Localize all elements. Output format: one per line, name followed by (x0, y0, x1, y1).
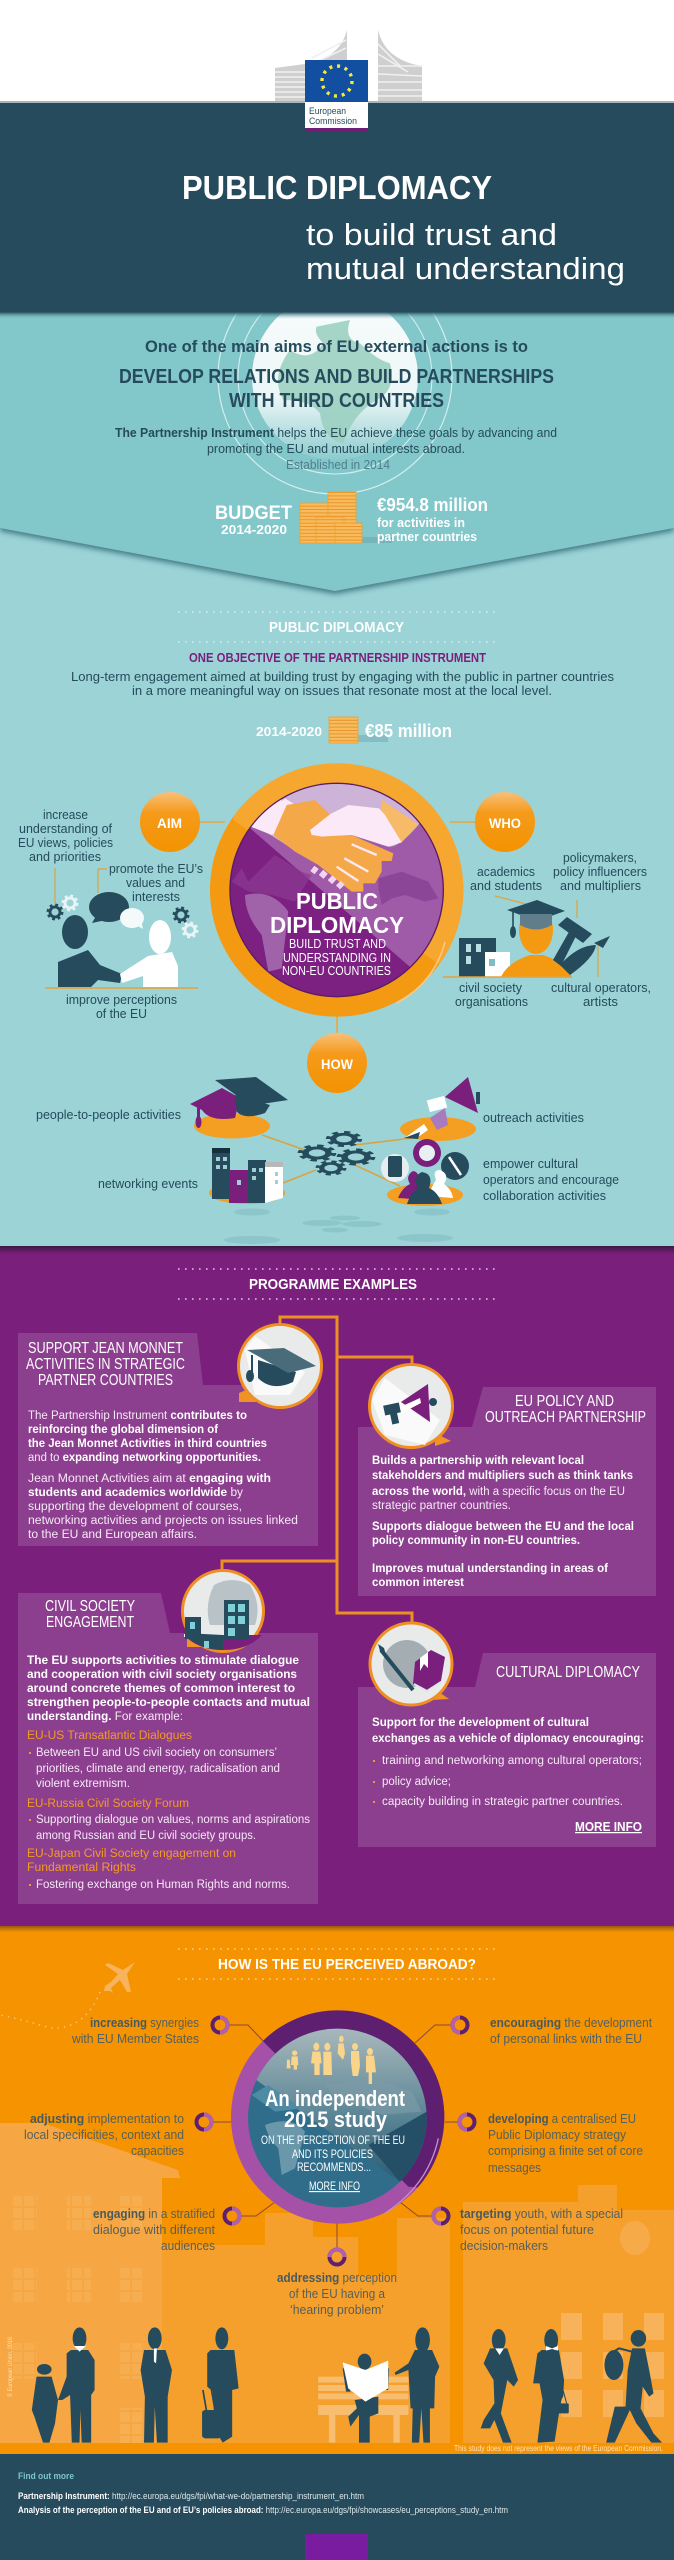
study text: 2015 study (284, 2107, 388, 2132)
recommendation: engaging: engaging in a stratified (93, 2207, 215, 2221)
recommendation: targeting: decision-makers (460, 2239, 548, 2253)
how labels: outreach activities (483, 1111, 584, 1125)
aim labels (18, 808, 203, 1021)
recommendation: developing: comprising a finite set of core (488, 2144, 643, 2158)
who badge (475, 792, 535, 852)
budget: BUDGET (215, 503, 292, 524)
who labels: policymakers, (563, 851, 637, 865)
body: priorities, climate and energy, radicalisation and (36, 1763, 280, 1775)
heading: EU POLICY AND (515, 1393, 614, 1410)
body: Fostering exchange on Human Rights and norms. (36, 1879, 290, 1891)
recommendation nodes (196, 2018, 474, 2264)
heading: PARTNER COUNTRIES (38, 1372, 173, 1389)
body: and cooperation with civil society organisations (27, 1669, 297, 1681)
heading: how is the eu perceived abroad: HOW IS THE EU PERCEIVED ABROAD? (218, 1956, 476, 1973)
recommendation: targeting (460, 2207, 623, 2253)
footer: Analysis of the perception of the EU and of EU’s policies abroad: http://ec.europa.eu/dgs/fpi/showcases/eu_perceptions_study_en.htm (18, 2505, 508, 2516)
footer (0, 2454, 674, 2560)
intro text: One of the main aims of EU external actions is to (145, 338, 528, 356)
icon: globe, brush and book badge (370, 1623, 452, 1705)
icon: coin stack (329, 717, 388, 743)
recommendation: engaging (93, 2207, 216, 2253)
connector lines (199, 822, 475, 1035)
budget for public diplomacy (256, 717, 452, 743)
who labels: academics (477, 865, 535, 879)
recommendation: targeting: targeting youth, with a special (460, 2207, 623, 2221)
budget: €954.8 million (377, 495, 488, 515)
how badge: HOW (321, 1056, 354, 1072)
budget: for activities in (377, 515, 465, 530)
central circle text (270, 888, 404, 978)
central circle text: NON-EU COUNTRIES (282, 963, 391, 978)
body: across the world, with a specific focus on the EU (372, 1486, 625, 1498)
heading: programme examples: PROGRAMME EXAMPLES (249, 1276, 417, 1293)
who labels (455, 851, 651, 1009)
body: Between EU and US civil society on consumers’ (36, 1747, 277, 1759)
recommendation: encouraging (490, 2016, 652, 2046)
body: Supporting dialogue on values, norms and aspirations (36, 1814, 310, 1826)
objective text: ONE OBJECTIVE OF THE PARTNERSHIP INSTRUMENT (189, 650, 486, 665)
title: PUBLIC DIPLOMACY (182, 169, 492, 206)
who labels: and students (470, 879, 542, 893)
who badge: WHO (489, 815, 521, 831)
body: MORE INFO (575, 1820, 642, 1834)
recommendation: addressing: of the EU having a (289, 2287, 385, 2301)
recommendation: targeting: focus on potential future (460, 2223, 594, 2237)
body: the Jean Monnet Activities in third countries (28, 1438, 267, 1450)
figure: walker with backpack (604, 2330, 662, 2443)
title: to build trust and (306, 217, 557, 252)
who labels: artists (583, 995, 618, 1009)
body: strengthen people-to-people contacts and mutual (27, 1697, 310, 1709)
study text: RECOMMENDS... (297, 2162, 371, 2174)
title (182, 169, 625, 286)
aim labels: EU views, policies (18, 836, 113, 850)
body: reinforcing the global dimension of (28, 1424, 218, 1436)
budget (215, 492, 488, 544)
aim labels: of the EU (96, 1007, 147, 1021)
silhouettes of people (32, 2327, 662, 2443)
icon: graduate with gavel, brush and buildings (443, 896, 610, 977)
European Commission logo (275, 30, 422, 132)
footer: Find out more (18, 2471, 74, 2482)
recommendation: addressing: ‘hearing problem’ (290, 2303, 384, 2317)
aim labels: interests (132, 890, 180, 904)
aim badge: AIM (157, 815, 182, 831)
body: among Russian and EU civil society groups. (36, 1830, 256, 1842)
body (28, 1410, 298, 1541)
body: around concrete themes of common interest to (27, 1683, 295, 1695)
aim labels: understanding of (19, 822, 113, 836)
recommendation: increasing synergies: increasing synergies (90, 2016, 199, 2030)
icon: plane with dotted trail (0, 1962, 135, 2028)
how labels: networking events (98, 1177, 198, 1191)
lower teal background (0, 500, 674, 1247)
body: The EU supports activities to stimulate dialogue (27, 1655, 299, 1667)
intro text: Established in 2014 (286, 457, 390, 472)
European Commission logo: Commission (309, 116, 357, 127)
panel: jean monnet (18, 1324, 322, 1546)
body: policy advice; (382, 1776, 451, 1788)
body: networking activities and projects on issues linked (28, 1515, 298, 1527)
diagram: how network of gears (190, 1077, 480, 1244)
figure: woman in dress (395, 2327, 439, 2443)
icon: people silhouettes (287, 2036, 376, 2084)
body: strategic partner countries. (372, 1500, 511, 1512)
heading: CIVIL SOCIETY (45, 1598, 135, 1615)
icon: people with media on disc (381, 1139, 469, 1206)
body: EU-US Transatlantic Dialogues (27, 1730, 192, 1742)
icon: megaphone on disc (400, 1077, 480, 1141)
study text (261, 2086, 406, 2193)
body (372, 1717, 644, 1834)
heading (45, 1598, 135, 1631)
body: Support for the development of cultural (372, 1717, 589, 1729)
how labels (36, 1108, 619, 1203)
aim labels: increase (43, 808, 88, 822)
central circle text: BUILD TRUST AND (289, 936, 386, 951)
icon: graduation cap badge (238, 1324, 322, 1408)
panel: eu policy and outreach (358, 1364, 656, 1596)
how labels: people-to-people activities (36, 1108, 181, 1122)
heading (26, 1340, 185, 1389)
study text: ON THE PERCEPTION OF THE EU (261, 2135, 405, 2147)
recommendation: developing: messages (488, 2161, 541, 2175)
body: policy community in non-EU countries. (372, 1535, 580, 1547)
figure: woman with folded leg (481, 2329, 518, 2443)
who labels: cultural operators, (551, 981, 651, 995)
connector tree (222, 1317, 412, 1624)
aim labels: values and (126, 876, 185, 890)
body: Jean Monnet Activities aim at engaging with (28, 1473, 271, 1485)
who labels: policy influencers (553, 865, 647, 879)
orange section background (0, 1923, 674, 2454)
study text: An independent (265, 2086, 406, 2111)
body: common interest (372, 1577, 464, 1589)
section heading: public diplomacy: PUBLIC DIPLOMACY (269, 619, 404, 636)
body: and to expanding networking opportunities. (28, 1452, 261, 1464)
panel: cultural diplomacy (358, 1623, 656, 1847)
recommendation: developing: Public Diplomacy strategy (488, 2128, 627, 2142)
recommendation: addressing: addressing perception (277, 2271, 397, 2285)
header band (0, 0, 674, 312)
budget for public diplomacy: 2014-2020 (256, 724, 322, 739)
objective text: Long-term engagement aimed at building trust by engaging with the public in partner countries (71, 669, 614, 684)
recommendation: adjusting: local specificities, context and (24, 2128, 184, 2142)
icon: handshake (272, 798, 418, 892)
budget: 2014-2020 (221, 522, 287, 537)
body: Improves mutual understanding in areas of (372, 1563, 608, 1575)
intro text: The Partnership Instrument helps the EU achieve these goals by advancing and (115, 425, 557, 440)
body: The Partnership Instrument contributes to (28, 1410, 247, 1422)
recommendation: increasing synergies (71, 2016, 199, 2046)
intro text: promoting the EU and mutual interests abroad. (207, 441, 465, 456)
central circle text: UNDERSTANDING IN (283, 950, 391, 965)
budget for public diplomacy: €85 million (365, 721, 452, 741)
body: Supports dialogue between the EU and the local (372, 1521, 634, 1533)
globe watermark (218, 312, 453, 494)
body (27, 1655, 310, 1891)
recommendation: engaging: audiences (161, 2239, 215, 2253)
aim badge (140, 792, 200, 852)
icon: coins (300, 492, 392, 543)
European Commission logo: European (309, 106, 346, 117)
central circle: independent study (231, 2005, 458, 2224)
copyright: © European Union, 2016 (6, 2337, 14, 2397)
connector lines to recommendations (213, 2025, 458, 2248)
body: Builds a partnership with relevant local (372, 1455, 584, 1467)
study text: AND ITS POLICIES (292, 2149, 373, 2161)
recommendation: engaging: dialogue with different (93, 2223, 216, 2237)
body: to the EU and European affairs. (28, 1529, 197, 1541)
objective text (71, 650, 614, 698)
how badge (307, 1033, 367, 1093)
study text: MORE INFO (309, 2181, 360, 2193)
who labels: and multipliers (560, 879, 641, 893)
recommendation: encouraging: of personal links with the EU (490, 2032, 642, 2046)
heading: ENGAGEMENT (46, 1614, 134, 1631)
objective text: in a more meaningful way on issues that resonate most at the local level. (132, 683, 552, 698)
how labels: collaboration activities (483, 1189, 606, 1203)
aim labels: promote the EU’s (109, 862, 203, 876)
body: violent extremism. (36, 1778, 130, 1790)
body: training and networking among cultural operators; (382, 1755, 642, 1767)
body: EU-Japan Civil Society engagement on (27, 1848, 236, 1860)
icon: buildings on disc (209, 1148, 285, 1204)
recommendation: addressing (277, 2271, 397, 2317)
recommendation: adjusting: adjusting implementation to (30, 2112, 184, 2126)
who labels: organisations (455, 995, 528, 1009)
icon: two people shaking hands (45, 868, 198, 988)
recommendation: adjusting: capacities (131, 2144, 184, 2158)
intro text: WITH THIRD COUNTRIES (229, 390, 444, 412)
how labels: empower cultural (483, 1157, 578, 1171)
heading: SUPPORT JEAN MONNET (28, 1340, 183, 1357)
icon: megaphone badge (370, 1364, 452, 1448)
budget: partner countries (377, 529, 477, 544)
figure: man with tie (141, 2327, 172, 2443)
central circle text: DIPLOMACY (270, 912, 404, 938)
heading: CULTURAL DIPLOMACY (496, 1664, 640, 1681)
icon: graduation cap on disc (190, 1077, 288, 1138)
central circle text: PUBLIC (296, 888, 378, 914)
recommendation: adjusting (24, 2112, 184, 2158)
intro text (115, 338, 557, 472)
heading: ACTIVITIES IN STRATEGIC (26, 1356, 185, 1373)
body: capacity building in strategic partner countries. (382, 1796, 623, 1808)
central circle: public diplomacy (210, 755, 470, 1017)
heading (485, 1393, 646, 1426)
how labels: operators and encourage (483, 1173, 619, 1187)
aim labels: improve perceptions (66, 993, 177, 1007)
footer: Partnership Instrument: http://ec.europa.eu/dgs/fpi/what-we-do/partnership_instrument_en.htm (18, 2491, 364, 2502)
purple section background (0, 1246, 674, 1925)
figure: reader on bench (318, 2354, 408, 2443)
title: mutual understanding (306, 251, 625, 286)
recommendation: developing: developing a centralised EU (488, 2112, 636, 2126)
body: students and academics worldwide by (28, 1487, 243, 1499)
body: exchanges as a vehicle of diplomacy encouraging: (372, 1733, 644, 1745)
intro text: DEVELOP RELATIONS AND BUILD PARTNERSHIPS (119, 366, 554, 388)
figure: child and woman (32, 2327, 95, 2443)
reflection (224, 1208, 453, 1244)
body: understanding. For example: (27, 1711, 183, 1723)
figure: woman with handbag (533, 2329, 569, 2443)
aim labels: and priorities (29, 850, 101, 864)
panel: civil society engagement (18, 1570, 318, 1904)
body: EU-Russia Civil Society Forum (27, 1798, 189, 1810)
who labels: civil society (459, 981, 523, 995)
body: supporting the development of courses, (28, 1501, 242, 1513)
recommendation: encouraging: encouraging the development (490, 2016, 652, 2030)
figure: traveller with luggage (202, 2327, 239, 2443)
recommendation: developing (488, 2112, 643, 2175)
icon: globe and buildings badge (182, 1570, 264, 1652)
body: Fundamental Rights (27, 1862, 136, 1874)
recommendation: increasing synergies: with EU Member States (71, 2032, 199, 2046)
body: stakeholders and multipliers such as think tanks (372, 1470, 633, 1482)
body (372, 1455, 634, 1589)
chevron panel: aims and budget (0, 312, 674, 598)
